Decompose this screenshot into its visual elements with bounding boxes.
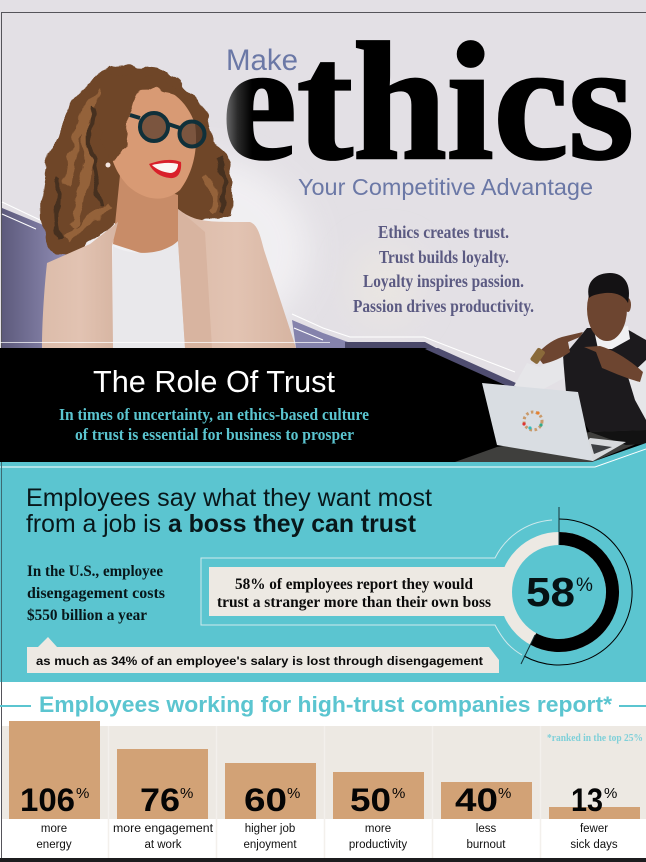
bar: 60% higher job enjoyment: enjoyment — [243, 839, 297, 851]
teal subheading: In times of uncertainty, an ethics-based culture — [59, 405, 369, 424]
bar: 13% fewer sick days — [549, 782, 640, 851]
bar: 76% more engagement at work: at work — [144, 839, 182, 851]
donut chart 58%: 58 — [526, 569, 575, 615]
donut chart 58% — [506, 507, 632, 665]
bar: 13% fewer sick days: 13 — [571, 782, 603, 818]
pointing hands — [536, 332, 583, 364]
ethics statements: Ethics creates trust. — [378, 222, 509, 242]
table — [455, 430, 646, 462]
glasses — [130, 113, 204, 146]
vest — [563, 328, 646, 432]
bar: 60% higher job enjoyment: higher job — [245, 823, 295, 835]
bar: 40% less burnout: less — [476, 823, 496, 835]
watch — [530, 347, 546, 365]
bar: 40% less burnout — [441, 782, 532, 851]
bar: 40% less burnout: 40 — [455, 782, 498, 818]
white shirt — [113, 241, 185, 348]
bar: 106% more energy: more — [41, 823, 67, 835]
bar: 76% more engagement at work: 76 — [140, 782, 180, 818]
trust callout box: trust a stranger more than their own boss — [217, 594, 491, 611]
ethics statements: Trust builds loyalty. — [379, 247, 509, 267]
blazer — [42, 209, 296, 348]
short hair — [588, 273, 629, 303]
ethics statements — [353, 222, 534, 316]
bar: 60% higher job enjoyment — [225, 763, 316, 851]
head — [587, 277, 627, 341]
teal subheading — [59, 405, 369, 444]
photo: smiling woman with glasses — [0, 65, 330, 348]
bar: 13% fewer sick days: sick days — [570, 839, 618, 851]
bar: 106% more energy: energy — [36, 839, 72, 851]
title word: ethics: ethics — [222, 9, 634, 195]
donut chart 58%: % — [576, 575, 593, 596]
bar: 40% less burnout: % — [498, 785, 511, 802]
bar: 76% more engagement at work: more engagement — [113, 823, 214, 835]
bar: 50% more productivity: more — [365, 823, 391, 835]
hair — [41, 65, 233, 256]
disengagement cost text: disengagement costs — [27, 585, 165, 602]
trust callout box: 58% of employees report they would — [235, 576, 473, 593]
disengagement cost text — [27, 563, 165, 624]
trust callout box — [201, 520, 552, 655]
laptop — [482, 383, 626, 461]
bar: 106% more energy: 106 — [20, 782, 75, 818]
photo: man pointing behind laptop — [455, 273, 646, 462]
title — [222, 9, 634, 200]
bar: 50% more productivity — [333, 772, 424, 851]
bar: 50% more productivity: productivity — [349, 839, 407, 851]
bar: 50% more productivity: 50 — [350, 782, 391, 818]
neck and collar — [594, 326, 630, 349]
bar: 60% higher job enjoyment: % — [287, 785, 300, 802]
teal panel: what employees want — [0, 443, 646, 682]
bar: 106% more energy — [9, 721, 100, 851]
purple diagonal band behind woman — [2, 202, 515, 372]
heading: The Role Of Trust — [93, 364, 335, 399]
hero panel background — [0, 0, 646, 348]
laptop logo — [522, 411, 543, 430]
bar: 60% higher job enjoyment: 60 — [244, 782, 287, 818]
teal panel heading: from a job is a boss they can trust — [26, 510, 417, 538]
salary callout: as much as 34% of an employee's salary is lost through disengagement — [36, 655, 483, 668]
disengagement cost text: In the U.S., employee — [27, 563, 163, 580]
bar: 13% fewer sick days: % — [604, 785, 617, 802]
bottom panel: high-trust companies report — [0, 682, 646, 862]
bar: 40% less burnout: burnout — [466, 839, 506, 851]
footnote: *ranked in the top 25% — [547, 733, 643, 744]
earring — [106, 162, 110, 168]
disengagement cost text: $550 billion a year — [27, 607, 147, 624]
front hair over forehead — [98, 74, 190, 162]
bar: 13% fewer sick days: fewer — [580, 823, 608, 835]
black panel: the role of trust — [0, 348, 646, 462]
ethics statements: Loyalty inspires passion. — [363, 271, 524, 291]
title line: Make: Make — [226, 44, 298, 77]
neck — [113, 175, 178, 256]
bar: 50% more productivity: % — [392, 785, 405, 802]
section heading: Employees working for high-trust companies report* — [39, 692, 612, 717]
bar: 76% more engagement at work — [113, 749, 214, 851]
smile — [149, 160, 181, 178]
teal panel heading — [26, 484, 432, 538]
subtitle: Your Competitive Advantage — [298, 174, 593, 200]
face — [110, 86, 196, 199]
bar: 106% more energy: % — [76, 785, 89, 802]
shirt sleeves — [514, 355, 564, 392]
teal panel heading: Employees say what they want most — [26, 484, 432, 512]
teal subheading: of trust is essential for business to prosper — [75, 425, 354, 444]
salary callout — [27, 637, 499, 673]
ethics statements: Passion drives productivity. — [353, 296, 534, 316]
bar: 76% more engagement at work: % — [180, 785, 193, 802]
